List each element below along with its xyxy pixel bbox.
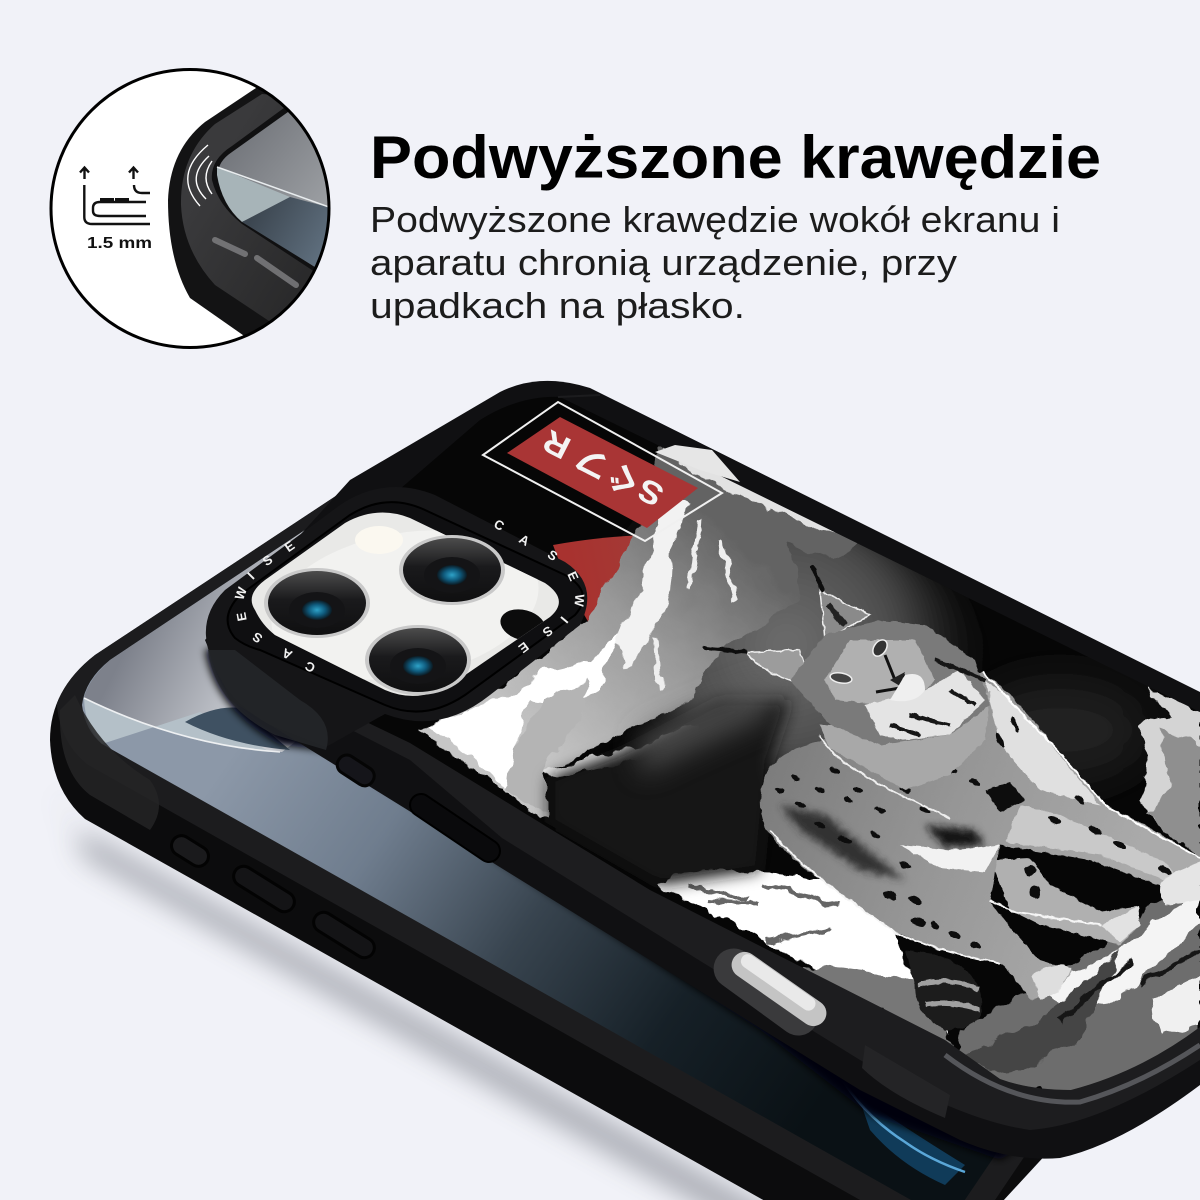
body text: upadkach na płasko. (370, 285, 745, 326)
art: black background (369, 397, 1200, 1088)
body text: Podwyższone krawędzie wokół ekranu i (370, 199, 1060, 240)
bottom right wallpaper arcs (848, 1090, 966, 1174)
camera ring lettering: C (302, 658, 318, 676)
wallpaper arc highlight (84, 698, 280, 752)
camera ring (228, 502, 583, 712)
lynx illustration (705, 566, 1200, 1030)
art: lower snow field (655, 868, 950, 1035)
art: snow over label corner (655, 445, 740, 482)
lens 1 (264, 568, 370, 638)
lynx: far hind leg (990, 858, 1140, 945)
camera ring lettering: I (244, 569, 257, 582)
lens 3 (365, 625, 471, 695)
front phone (200, 380, 1200, 1160)
lynx: chest outline (820, 735, 950, 818)
art: grey mid slope (640, 680, 770, 775)
lynx: tail (905, 950, 982, 1030)
back phone button: volume down (310, 909, 378, 961)
inset: impact arcs (188, 145, 212, 206)
lynx: dark patch on shoulder (985, 782, 1025, 812)
front phone rim band (215, 660, 1200, 1130)
camera ring lettering: A (279, 645, 295, 663)
art: right smoke (1002, 674, 1146, 784)
camera ring lettering: E (282, 537, 298, 555)
inset: 1.5 mm label: 1.5 mm (87, 235, 152, 252)
art: mountain shadow (550, 700, 790, 885)
body text (370, 199, 1060, 326)
camera bump (206, 487, 587, 750)
phone artwork (369, 397, 1200, 1090)
art: red label lettering: Sぐフ R (537, 423, 669, 514)
charging port (706, 941, 832, 1043)
lynx: neck and chest (820, 690, 990, 790)
microphone cutout (497, 605, 549, 645)
back phone with screen (50, 480, 1100, 1200)
front phone button: camera control (334, 752, 378, 789)
camera window (252, 513, 559, 696)
camera ring lettering: C (491, 516, 507, 534)
inset: dark wallpaper (242, 197, 332, 267)
body text: aparatu chronią urządzenie, przy (370, 242, 957, 283)
lynx: fore leg front shading (1005, 805, 1190, 890)
back phone rim band (82, 500, 1100, 1200)
inset: case bumper corner (168, 88, 269, 336)
inset: wallpaper highlight line (217, 167, 329, 207)
back phone screen (82, 530, 993, 1200)
lynx: body shadows (925, 825, 985, 848)
art: red label (507, 417, 698, 528)
front phone button: side (406, 790, 504, 866)
lynx: light back fur (985, 680, 1100, 805)
camera ring lettering: W (571, 594, 587, 608)
lynx: belly fur highlight (900, 845, 1000, 872)
art: right rock (1138, 685, 1200, 850)
lynx: near ear with tuft (820, 590, 870, 640)
art: mountain body (420, 447, 860, 820)
camera ring lettering: A (516, 531, 533, 549)
front phone top bumper (205, 381, 1200, 1159)
bottom right wallpaper glow (862, 1104, 965, 1185)
art: lower grey ground (802, 964, 954, 1046)
lynx: ruff (865, 670, 985, 740)
inset: screen glass (212, 108, 314, 270)
camera bump lower carbon shade (208, 650, 328, 750)
art: mountain snow (615, 500, 690, 670)
lynx: paw (1160, 862, 1200, 905)
art: branch and rock (958, 885, 1200, 1090)
lens 2 (399, 535, 505, 605)
front rim highlight (945, 1045, 1200, 1102)
art: landscape (420, 445, 1200, 1095)
front rim carbon patch right (862, 1045, 950, 1118)
art: red sun (553, 536, 633, 622)
wallpaper pale panel (84, 698, 270, 752)
inset: pale wallpaper (217, 167, 290, 222)
camera ring lettering: S (249, 629, 265, 646)
phone shadow (60, 790, 800, 1200)
lynx: head (790, 620, 990, 745)
camera bump outer housing (206, 487, 587, 747)
back phone button: action (168, 832, 212, 870)
inset circle: raised edge detail (51, 70, 340, 348)
lynx: face details (829, 637, 925, 701)
art: mountain streaks (655, 520, 735, 690)
camera ring lettering: I (558, 614, 571, 626)
back phone bumper (50, 480, 1060, 1200)
art: snow markings (690, 885, 840, 940)
lynx: near hind leg and body (760, 672, 1200, 1000)
camera ring lettering: S (539, 623, 556, 640)
inset: 1.5 mm edge height icon (80, 168, 150, 224)
lynx: spots (774, 717, 1173, 950)
inset: rim highlights (215, 240, 296, 285)
camera ring lettering (232, 516, 587, 676)
camera ring lettering: W (232, 584, 250, 602)
lynx: far ear with tuft (745, 650, 810, 685)
art: red label outline (483, 402, 722, 541)
art: smoke wash (660, 512, 968, 772)
wallpaper upper area (84, 530, 304, 752)
camera ring lettering: S (260, 551, 276, 569)
camera ring lettering: E (515, 639, 532, 656)
flash (355, 526, 403, 554)
back phone left carbon patch (60, 695, 159, 830)
front phone soft side (205, 600, 1100, 1160)
camera ring lettering: S (545, 547, 561, 564)
art: snow ledge (545, 725, 700, 778)
wallpaper dark blob (185, 708, 290, 750)
art: thin corner line (558, 395, 600, 397)
camera ring lettering: E (233, 611, 250, 622)
back phone button: volume up (230, 863, 298, 915)
title: Podwyższone krawędzie (370, 124, 1101, 191)
camera glass plateau (260, 511, 550, 699)
lynx: rim light (770, 830, 1102, 963)
inset: translucent rim band (181, 94, 312, 321)
camera ring lettering: E (564, 569, 582, 583)
